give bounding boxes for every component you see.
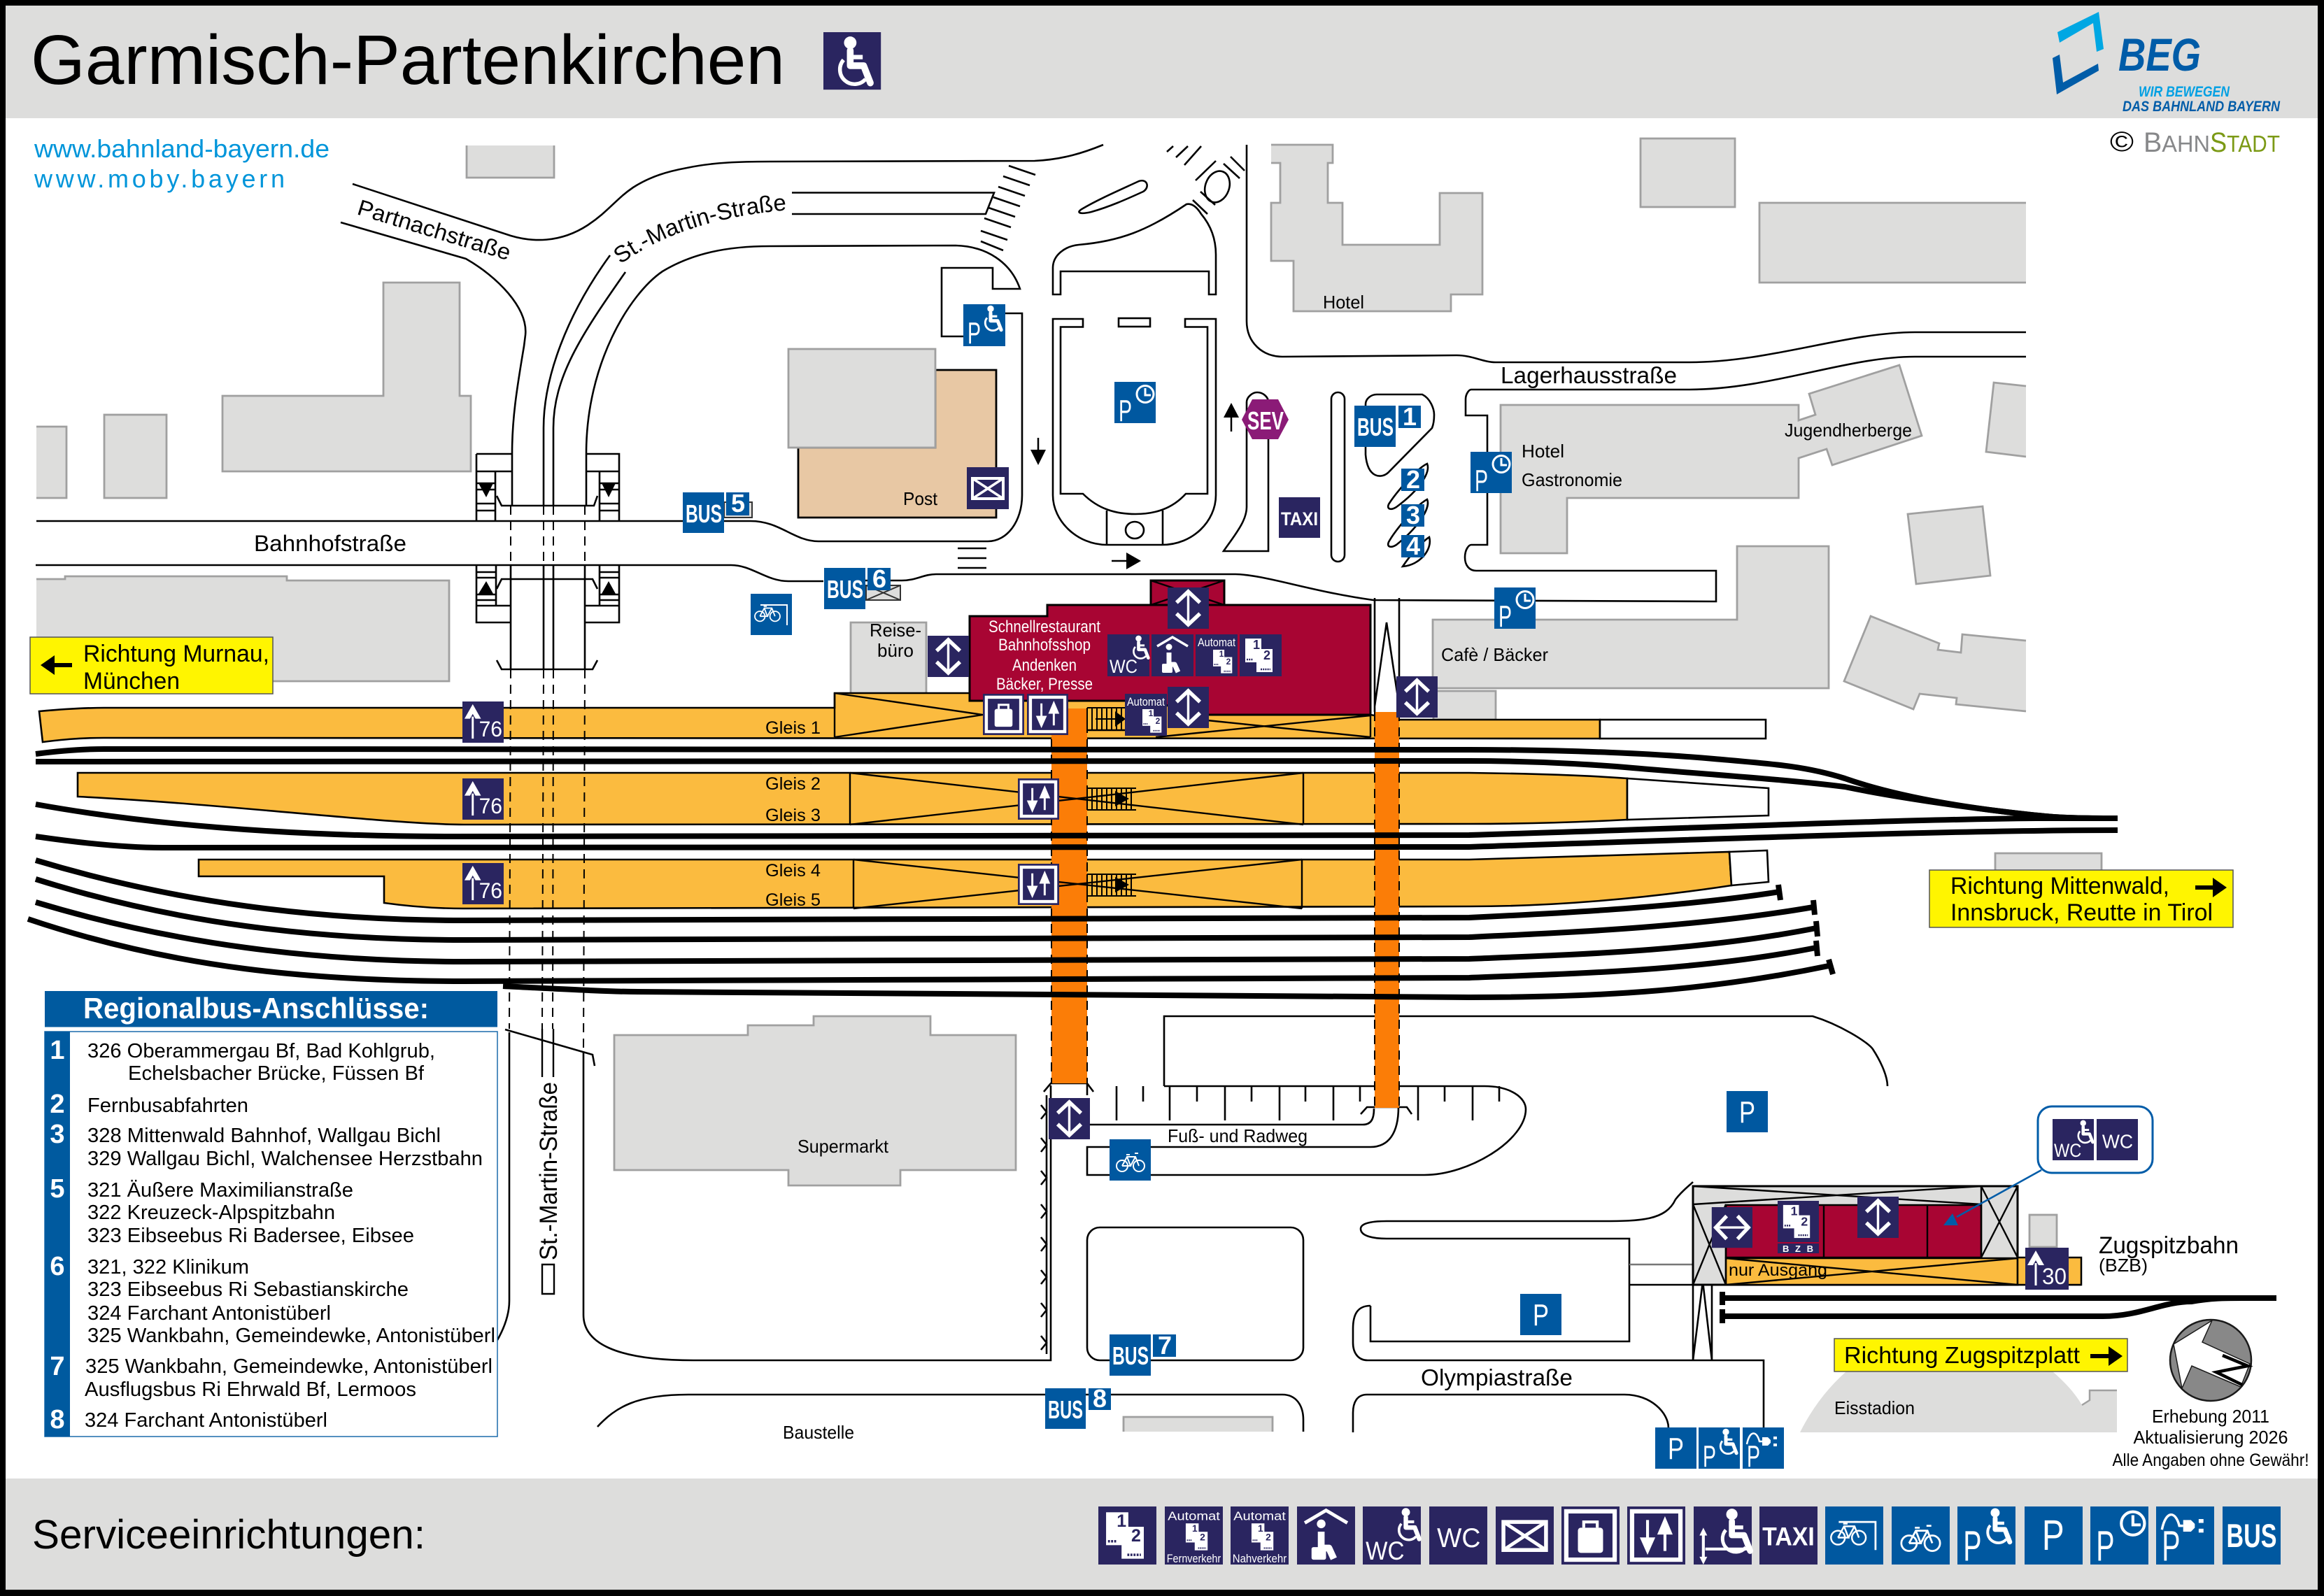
survey note: Erhebung 2011 [2152,1406,2269,1427]
route list: 324 Farchant Antonistüberl [87,1302,331,1325]
website links: www.bahnland-bayern.de [34,134,330,163]
panel: Regionalbus table [45,991,497,1437]
tunnel 2 north bridge [1375,598,1399,712]
restaurant text: Andenken [1012,656,1077,675]
labels for the map: St.-Martin-Straße [614,196,785,262]
labels for the map: Olympiastraße [1421,1365,1573,1390]
sign: Richtung Murnau: Richtung Murnau, [83,641,269,667]
bus stop 3: 3 [1406,501,1420,529]
place labels: Reise- [870,620,921,641]
underpass north [476,454,619,521]
place labels: Baustelle [783,1422,854,1443]
legend: bike [1892,1506,1950,1565]
place labels: Hotel [1323,292,1364,313]
bus stop 8 [1045,1384,1111,1429]
Eisstadion shape [1800,1371,2117,1432]
legend: ticket machine: 1 [1117,1511,1126,1531]
bus stop 4 [1401,532,1424,560]
Gleis labels: Gleis 4 [765,861,821,881]
Zugspitzbahn signs [1712,1207,1752,1248]
bus shelters [724,502,900,600]
icon: SEV [1242,399,1289,439]
legend: Automat Fernverkehr [1165,1506,1223,1565]
sign: Richtung Murnau [30,637,273,694]
stop numbers: 7 [50,1352,65,1381]
icons: station services row: Automat [1198,636,1235,649]
icon: wheelchair accessible [823,32,881,90]
legend: bus: BUS [2227,1517,2276,1554]
BEG logo: DAS BAHNLAND BAYERN [2123,99,2281,115]
route list: 324 Farchant Antonistüberl [85,1409,327,1432]
Zugspitzbahn label [2099,1232,2239,1276]
BahnStadt copyright: BAHN [2144,127,2210,158]
labels for the map: Bahnhofstraße [254,531,406,556]
icons: station services row [967,467,1282,905]
survey note: Alle Angaben ohne Gewähr! [2113,1451,2309,1470]
platform stair crossings [835,693,1370,909]
underpass south [476,566,619,622]
BahnStadt copyright: © [2110,127,2134,157]
bus stop 6: 6 [872,564,886,593]
bus stop 3 [1401,501,1424,529]
icon: parking blue group: P [1498,599,1512,634]
legend: bike shelter [1825,1506,1883,1565]
legend: Automat Fernverkehr: 1 [1192,1523,1198,1534]
legend: short-stay parking [2090,1506,2148,1569]
icon: parking blue group: P [1475,464,1488,498]
place labels: Cafè / Bäcker [1441,644,1548,665]
route list: 322 Kreuzeck-Alpspitzbahn [87,1202,335,1224]
Zugspitzbahn station: BZB [1783,1244,1813,1254]
bus stop 5: 5 [731,489,745,518]
place labels [783,292,1912,1443]
legend: e-charging parking: P [2162,1522,2181,1569]
legend: Automat Nahverkehr [1231,1506,1289,1565]
place labels: Post [903,488,938,509]
signs: platform sector 76: 30 [2042,1264,2067,1289]
footer heading: Serviceeinrichtungen: [32,1512,425,1558]
icons: station services row: 1 [1219,649,1224,659]
labels for the map: Lagerhausstraße [1501,362,1677,388]
Zugspitzbahn label: Zugspitzbahn [2099,1232,2239,1259]
place labels: Gastronomie [1522,469,1622,490]
icons: station services row: 2 [1226,657,1231,667]
BEG logo [2053,12,2281,115]
panel: footer [6,1479,2318,1590]
underpass triangles [479,483,616,594]
legend: wheelchair lift [1694,1506,1752,1565]
icons: station services row: Automat [1127,695,1165,708]
icon: parking blue group: P [1533,1298,1549,1332]
icon: Taxi [1279,497,1320,538]
BahnStadt copyright [2110,127,2280,158]
legend: WC [1429,1506,1487,1565]
legend: luggage [1561,1506,1620,1565]
bus stop 6: BUS [827,575,863,604]
icons: station services row: 2 [1263,648,1270,662]
restaurant text: Schnellrestaurant [989,618,1100,636]
legend: waiting room [1297,1506,1355,1565]
sign: Richtung Murnau: München [83,668,180,694]
legend: ticket machine [1098,1506,1156,1565]
stop numbers: 6 [50,1252,65,1281]
Gleis labels: Gleis 2 [765,774,821,794]
route list: Echelsbacher Brücke, Füssen Bf [128,1062,425,1085]
restaurant text: Bahnhofsshop [998,636,1091,655]
legend: lift [1627,1506,1685,1565]
Zugspitzbahn station: 1 [1791,1204,1798,1218]
place labels: büro [877,640,914,661]
callout WC [2038,1106,2153,1173]
callout pointer [1943,1170,2041,1225]
icon: parking blue group: P [1739,1095,1755,1130]
route list [85,1040,495,1432]
bus stop 8: BUS [1048,1395,1083,1424]
title: Garmisch-Partenkirchen [31,21,785,99]
legend: Automat Fernverkehr: 2 [1200,1531,1205,1542]
place labels: Jugendherberge [1785,420,1912,441]
BahnStadt copyright: STADT [2210,127,2280,158]
legend: Automat Nahverkehr: Nahverkehr [1233,1552,1287,1565]
signs: platform sector 76 [462,701,2069,1290]
bus stop 1: 1 [1403,402,1417,431]
icons: stairs up-down [928,587,1438,1139]
icon: parking blue group: P [1668,1432,1684,1466]
legend: parking [2025,1506,2083,1565]
post building [798,370,996,518]
shops arrows on road [1030,403,1239,569]
legend: wheelchair WC: WC [1366,1536,1404,1565]
icon: parking blue group: P [968,316,981,350]
survey note [2113,1406,2309,1470]
icon: parking blue group: P [1119,394,1132,428]
callout WC: WC [2054,1140,2081,1161]
icons: station services row: WC [1110,656,1138,677]
compass [2170,1320,2251,1401]
bus stop 7: 7 [1158,1331,1172,1360]
route list: 323 Eibseebus Ri Badersee, Eibsee [87,1225,414,1247]
route list: 325 Wankbahn, Gemeindewke, Antonistüberl [87,1325,495,1347]
route list: 328 Mittenwald Bahnhof, Wallgau Bichl [87,1125,441,1147]
legend: Automat Nahverkehr: 1 [1258,1523,1263,1534]
icons: station services row: 2 [1156,716,1161,726]
icon: parking blue group: P [1747,1439,1760,1474]
legend: disabled parking [1957,1506,2015,1569]
legend: bus [2223,1506,2281,1565]
route list: 329 Wallgau Bichl, Walchensee Herzstbahn [87,1148,483,1170]
Zugspitzbahn label: (BZB) [2099,1255,2148,1276]
bus stop 7: BUS [1112,1341,1149,1370]
legend: disabled parking: P [1963,1522,1982,1569]
legend: taxi [1759,1506,1818,1565]
labels for the map: St.-Martin-Straße [535,1082,562,1260]
route list: 321 Äußere Maximilianstraße [87,1179,353,1202]
hidden footpath dashed lines [509,506,1399,1108]
website links: www.moby.bayern [34,164,285,193]
route list: Fernbusabfahrten [87,1095,248,1117]
place labels: Supermarkt [798,1136,889,1157]
place labels: Hotel [1522,441,1564,462]
legend: e-charging parking [2156,1506,2214,1569]
bus stop 2 [1401,465,1424,494]
legend: Automat Nahverkehr: 2 [1266,1531,1271,1542]
route list: 325 Wankbahn, Gemeindewke, Antonistüberl [85,1355,493,1378]
signs: platform sector 76: 76 [479,878,502,903]
bus stop 7 [1110,1331,1176,1376]
signs: platform sector 76: 76 [479,794,502,818]
nur Ausgang: nur Ausgang [1729,1261,1827,1280]
street label lines St.-Martin vertical [542,1029,554,1294]
street network [36,145,2081,1432]
icon: parking blue group: P [1703,1439,1716,1474]
signs: platform sector 76: 76 [479,717,502,741]
sign: Richtung Mittenwald: Innsbruck, Reutte in Tirol [1950,899,2213,926]
railway tracks [28,749,2276,1323]
south streets [497,1029,595,1340]
Gleis labels [765,718,821,910]
header band [6,6,2318,118]
route list: 323 Eibseebus Ri Sebastianskirche [87,1278,409,1301]
route list: 326 Oberammergau Bf, Bad Kohlgrub, [87,1040,435,1062]
icon: SEV: SEV [1247,406,1284,435]
website links [34,134,330,193]
icon: parking blue group [963,304,1784,1474]
stop numbers: 3 [50,1120,65,1149]
bus stop signs [683,402,1424,1429]
BEG logo: WIR BEWEGEN [2139,84,2230,100]
bus stop 5: BUS [686,499,722,528]
icon: bicycle parking [751,594,1151,1181]
survey note: Aktualisierung 2026 [2134,1427,2288,1448]
pedestrian tunnels orange [1051,708,1399,1108]
platform 1 [39,693,1766,742]
Gleis labels: Gleis 3 [765,806,821,825]
sign: Richtung Zugspitzplatt [1834,1339,2127,1371]
stop numbers: 8 [50,1405,65,1434]
platform 2 and 3 [78,773,1769,825]
Eisstadion label: Eisstadion [1834,1397,1915,1418]
restaurant text: Bäcker, Presse [996,675,1093,694]
stairs on platforms [1087,708,1136,896]
sign: Richtung Mittenwald: Richtung Mittenwald, [1950,873,2169,899]
bus stop 4: 4 [1406,532,1420,560]
place labels: Fuß- und Radweg [1168,1125,1308,1146]
legend: short-stay parking: P [2096,1522,2115,1569]
restaurant text [989,618,1100,694]
legend: WC: WC [1437,1523,1480,1553]
Zugspitzbahn station: 2 [1801,1214,1808,1228]
route list: 321, 322 Klinikum [87,1256,249,1278]
route list: Ausflugsbus Ri Ehrwald Bf, Lermoos [85,1378,416,1401]
stop numbers [50,1036,65,1434]
icon: Taxi: TAXI [1281,508,1318,529]
BEG logo: BEG [2118,29,2201,80]
icons: station services row: 1 [1149,708,1154,718]
Zugspitzbahn station [1693,1106,2153,1285]
sign: Richtung Zugspitzplatt: Richtung Zugspitzplatt [1844,1342,2080,1368]
labels for the map: Partnachstraße [355,194,514,265]
table heading: Regionalbus-Anschlüsse: [83,992,429,1025]
legend: wheelchair WC [1363,1506,1421,1565]
bus stop 8: 8 [1093,1384,1107,1413]
stop numbers: 2 [50,1090,65,1119]
bus stop 1: BUS [1357,413,1394,441]
bus stop 1 [1354,402,1421,447]
legend: Automat Nahverkehr: Automat [1233,1509,1286,1523]
Gleis labels: Gleis 5 [765,890,821,910]
buildings grey [36,138,2102,1432]
legend: ticket machine: 2 [1131,1526,1141,1546]
bus stop 2: 2 [1406,465,1420,494]
legend: Automat Fernverkehr: Automat [1168,1509,1220,1523]
Gleis labels: Gleis 1 [765,718,821,738]
bus stop 6 [824,564,891,609]
icons: station services row: 1 [1253,638,1260,652]
stop numbers: 5 [50,1174,65,1204]
bus stop 5 [683,489,749,533]
station building red [970,580,1370,715]
sign: Richtung Mittenwald [1929,870,2233,927]
post grey wing [788,349,935,448]
stop numbers: 1 [50,1036,65,1065]
legend: Automat Fernverkehr: Fernverkehr [1167,1552,1221,1565]
labels for the map [254,194,1677,1390]
legend: parking: P [2042,1511,2064,1559]
callout WC: WC [2102,1130,2133,1152]
legend: post [1496,1506,1554,1565]
legend: taxi: TAXI [1762,1521,1815,1551]
platform 4 and 5 [199,850,1769,909]
